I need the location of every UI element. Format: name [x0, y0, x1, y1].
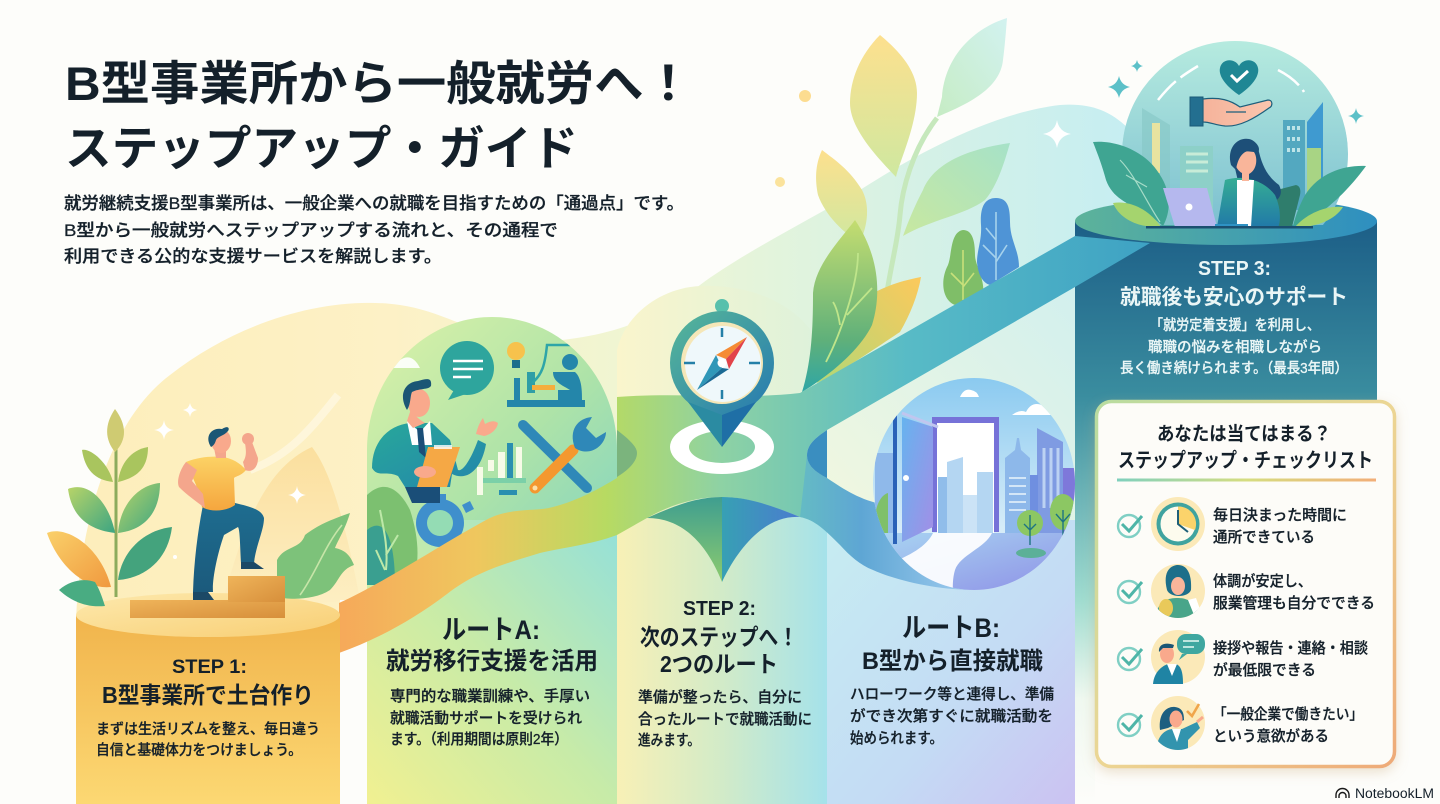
panel: step 3 cylinder: [1075, 41, 1377, 804]
title: ステップアップ・ガイド: [65, 122, 578, 175]
illustration: route A mentor and tools: [352, 341, 606, 585]
intro text block: 利用できる公的な支援サービスを解説します。: [64, 247, 442, 266]
text: route B: B型から直接就職: [862, 648, 1043, 675]
text: step 2: 合ったルートで就職活動に: [638, 711, 812, 728]
text: step 2: 進みます。: [638, 732, 700, 749]
checklist item: health management: 体調が安定し、: [1213, 572, 1312, 590]
text: route B: 始められます。: [850, 730, 943, 747]
checklist heading: ステップアップ・チェックリスト: [1118, 449, 1373, 472]
checklist item: health management: 服業管理も自分でできる: [1213, 594, 1375, 612]
text: step 3: 就職後も安心のサポート: [1120, 286, 1348, 309]
panel: route A column: [352, 317, 617, 804]
panel: route B column: [827, 287, 1075, 804]
checklist item: regular attendance: 通所できている: [1213, 529, 1315, 546]
checklist item: health management: [1118, 564, 1375, 620]
text: step 1: まずは生活リズムを整え、毎日違う: [96, 720, 320, 738]
decorative lens shapes on the hub: [617, 430, 827, 582]
icon: open hand: [1190, 97, 1272, 126]
text: step 1: B型事業所で土台作り: [102, 682, 314, 708]
icon: compass location pin: [670, 299, 774, 474]
panel: checklist card: [1096, 402, 1394, 766]
arrow: flowing path ribbon connecting steps: [339, 236, 1150, 653]
leaves beside step 3 desk: [1093, 142, 1366, 227]
text: route B: ができ次第すぐに就職活動を: [850, 707, 1053, 725]
title: B型事業所から一般就労へ！: [65, 57, 693, 110]
text: step 1: [96, 657, 320, 759]
text: route A: [386, 615, 598, 748]
illustration: steps: [130, 576, 285, 618]
decorative plant: large leaves upper centre: [775, 18, 1071, 292]
illustration: plant left of climber: [47, 409, 354, 606]
checklist item: communication: が最低限できる: [1213, 661, 1316, 679]
text: route A: ルートA:: [442, 615, 540, 645]
checklist item: motivation: 「一般企業で働きたい」: [1213, 706, 1363, 723]
text: step 2: [638, 598, 812, 749]
text: step 2: STEP 2:: [683, 598, 756, 620]
intro text block: [64, 194, 684, 266]
panel: step 2 column: [617, 286, 827, 804]
illustration: door to the city: [869, 378, 1079, 595]
sparkles: [154, 403, 306, 559]
text: step 3: 職職の悩みを相職しながら: [1148, 338, 1322, 356]
text: route A: 就職活動サポートを受けられ: [390, 709, 582, 727]
intro text block: B型から一般就労へステップアップする流れと、その通程で: [64, 221, 558, 240]
text: step 1: 自信と基礎体力をつけましょう。: [96, 742, 302, 759]
text: step 3: [1120, 258, 1348, 377]
text: route B: ハローワーク等と連得し、準備: [850, 685, 1054, 703]
watermark: NotebookLM: NotebookLM: [1355, 786, 1434, 801]
text: step 3: 長く働き続けられます。（最長3年間）: [1120, 359, 1348, 377]
illustration: step 3 dome: [1093, 41, 1366, 228]
plants growing over the ribbon: [802, 198, 1019, 392]
text: step 1: STEP 1:: [172, 657, 247, 678]
icon: heart with check: [1220, 60, 1258, 95]
checklist item: regular attendance: 毎日決まった時間に: [1213, 507, 1347, 524]
checklist item: communication: [1118, 630, 1368, 684]
checklist item: regular attendance: [1118, 497, 1347, 551]
text: step 3: 「就労定着支援」を利用し、: [1150, 317, 1320, 334]
text: route A: 就労移行支援を活用: [386, 648, 598, 675]
text: step 2: 2つのルート: [660, 651, 778, 677]
checklist item: motivation: という意欲がある: [1213, 727, 1329, 745]
panel: step 1 podium: [47, 403, 354, 804]
checklist item: motivation: [1118, 696, 1363, 752]
illustration: climbing person: [178, 427, 264, 600]
title: [65, 57, 693, 175]
background flowing hills: [76, 105, 1130, 804]
intro text block: 就労継続支援B型事業所は、一般企業への就職を目指すための「通過点」です。: [64, 194, 684, 213]
checklist item: communication: 接拶や報告・連絡・相談: [1213, 640, 1368, 657]
text: step 2: 準備が整ったら、自分に: [638, 688, 802, 706]
text: route B: ルートB:: [902, 613, 1000, 643]
text: route A: ます。（利用期間は原則2年）: [390, 731, 568, 748]
checklist heading: [1117, 423, 1376, 482]
arrow: lower ribbon branch to the door: [800, 455, 975, 590]
text: route B: [850, 613, 1054, 747]
text: step 3: STEP 3:: [1198, 258, 1271, 280]
text: step 2: 次のステップへ！: [640, 624, 798, 650]
text: route A: 専門的な職業訓練や、手厚い: [390, 688, 590, 705]
checklist heading: あなたは当てはまる？: [1157, 423, 1331, 445]
illustration: woman at laptop: [1146, 139, 1313, 228]
